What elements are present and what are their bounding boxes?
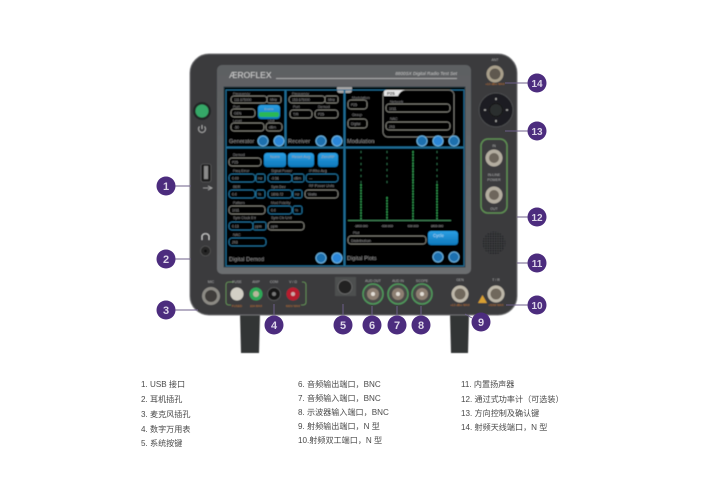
panel: digital plots: Distribution <box>351 238 371 243</box>
panel: digital demod: Pattern <box>233 201 245 205</box>
panel: generator: Unit <box>268 119 274 123</box>
legend column 3: 12. 通过式功率计（可选装） <box>461 394 564 404</box>
panel: digital demod <box>226 148 344 266</box>
panel: digital plots: Digital Plots <box>347 256 377 262</box>
panel: modulation: P25 <box>387 91 395 96</box>
legend column 1: 5. 系统按键 <box>141 438 182 448</box>
number badges: 1 <box>163 181 169 193</box>
panel: digital demod: 0.13 <box>232 224 239 228</box>
legend column 2 <box>298 379 389 445</box>
panel: digital demod: Hz <box>295 192 299 196</box>
panel: digital demod: Sym Dev <box>271 185 286 189</box>
number badges: 3 <box>163 305 169 317</box>
panel: digital plots: Cycle <box>433 233 445 238</box>
panel: digital demod: P25 <box>232 160 238 164</box>
stand leg right <box>450 313 469 353</box>
antenna port: ANT <box>492 58 499 62</box>
number badges: 14 <box>531 79 543 90</box>
screen <box>224 87 465 267</box>
panel: receiver: Demod <box>318 105 330 109</box>
multimeter ports: FUSE <box>232 280 242 284</box>
panel: digital demod: Digital Demod <box>229 257 264 263</box>
legend column 1: 1. USB 接口 <box>141 379 185 389</box>
legend column 1: 4. 数字万用表 <box>141 424 190 434</box>
panel: receiver <box>286 90 344 147</box>
number badges: 7 <box>394 320 400 332</box>
panel: digital demod: Sym Clk Unit <box>271 216 292 220</box>
panel: digital demod: ppm <box>255 224 262 228</box>
legend column 2: 9. 射频输出端口，N 型 <box>298 421 380 431</box>
through-line power meter ports: IN-LINE <box>488 173 501 177</box>
panel: digital demod: dBm <box>294 176 301 180</box>
number badges: 12 <box>531 213 543 224</box>
panel: digital demod: RF Power Units <box>309 184 334 188</box>
legend column 2: 10.射频双工端口，N 型 <box>298 435 382 445</box>
through-line power meter ports: IN <box>492 144 496 148</box>
rf ports: +13 dBm MAX <box>450 303 470 307</box>
panel: generator: 111.675000 <box>234 98 252 102</box>
panel: digital demod: 1011 <box>232 208 239 212</box>
bnc ports <box>363 279 432 304</box>
legend column 3 <box>461 379 564 432</box>
panel: receiver: 153.675000 <box>292 98 310 102</box>
brand logo: ÆROFLEX <box>229 70 272 80</box>
brand rule <box>276 78 457 79</box>
number badges: 9 <box>478 317 484 329</box>
panel: modulation: Modulation <box>347 139 374 145</box>
through-line power meter ports: POWER <box>487 178 501 182</box>
panel: modulation: NAC <box>390 117 398 121</box>
panel: generator: -50 <box>234 126 239 130</box>
number badges: 13 <box>531 127 543 138</box>
multimeter ports: COM <box>270 280 278 284</box>
panel: digital demod: NAC <box>233 233 241 237</box>
panel: digital demod: Sym Clock Err <box>233 216 257 220</box>
cycle button <box>428 231 458 245</box>
multimeter ports <box>226 280 306 308</box>
panel: digital demod: Hz <box>258 176 262 180</box>
rf ports: T / R <box>492 278 500 282</box>
bnc ports: AUD IN <box>392 279 404 283</box>
direction control <box>479 93 513 127</box>
panel: generator: MHz <box>270 98 277 102</box>
legend column 1 <box>141 379 190 448</box>
panel: modulation: Group <box>352 113 362 117</box>
panel: generator: Frequency <box>233 92 250 96</box>
bnc ports: AUD OUT <box>365 279 382 283</box>
panel: digital demod: % <box>295 208 298 212</box>
device body <box>190 54 517 315</box>
spectrum chart: -600.000 <box>381 224 393 228</box>
panel: digital demod: ZeroRF <box>321 154 335 159</box>
multimeter ports: FUSED <box>232 304 243 308</box>
panel: receiver: Port <box>293 105 300 109</box>
panel: digital demod: Norm <box>270 154 281 159</box>
antenna port: +10 dBm MAX <box>485 82 505 86</box>
mic connector: MIC <box>208 280 215 284</box>
multimeter ports: 10A MAX <box>250 304 262 308</box>
panel: digital demod: 1806.72 <box>271 192 283 196</box>
rf ports: +50W MAX <box>488 303 504 307</box>
panel: modulation: 1011 <box>389 107 396 111</box>
panel: digital demod: 0.0 <box>232 192 237 196</box>
antenna port <box>485 58 505 86</box>
icon: usb port <box>201 164 212 190</box>
number badges: 4 <box>271 320 278 332</box>
panel: digital demod: 293 <box>232 240 238 244</box>
bnc ports: SCOPE <box>416 279 429 283</box>
spectrum chart: 600.000 <box>408 224 419 228</box>
legend column 1: 3. 麦克风插孔 <box>141 409 190 419</box>
panel: digital plots: Plot <box>353 231 359 235</box>
panel: digital demod: % <box>258 192 261 196</box>
panel: generator: Generator <box>229 139 254 145</box>
multimeter ports: V / Ω <box>289 280 297 284</box>
callout lines <box>175 83 528 318</box>
legend column 3: 13. 方向控制及确认键 <box>461 408 539 418</box>
through-line power meter ports: OUT <box>490 207 499 211</box>
number badges: 2 <box>163 254 169 266</box>
panel: digital demod: Mod Fidelity <box>271 201 291 205</box>
enable button <box>258 105 280 119</box>
panel: receiver: Frequency <box>292 92 309 96</box>
number badges: 11 <box>532 259 543 270</box>
rf ports: GEN <box>456 278 464 282</box>
legend column 2: 8. 示波器输入端口，BNC <box>298 407 389 417</box>
panel: generator: GEN <box>234 112 242 116</box>
panel: receiver: Receiver <box>288 139 310 145</box>
stand leg left <box>240 313 260 353</box>
panel: generator: Port <box>233 105 240 109</box>
system key <box>335 277 356 296</box>
panel: modulation: 293 <box>389 125 395 129</box>
panel: digital demod: 0.0 <box>271 208 276 212</box>
panel: digital demod: Freq Error <box>233 169 250 173</box>
speaker grille <box>482 232 506 254</box>
legend column 3: 14. 射频天线端口，N 型 <box>461 422 547 432</box>
icon: power button <box>193 102 211 132</box>
multimeter ports: 600V MAX <box>286 304 300 308</box>
panel: modulation: Modulation <box>352 96 370 100</box>
panel: digital demod: IF/Rho Avg <box>309 169 327 173</box>
number badges: 6 <box>369 320 375 332</box>
multimeter ports: AMP <box>252 280 260 284</box>
legend column 2: 7. 音频输入端口，BNC <box>298 393 381 403</box>
number badges <box>156 74 546 334</box>
P25 settings box <box>383 90 454 137</box>
through-line power meter ports <box>481 139 507 213</box>
panel: modulation: P25 <box>351 103 357 107</box>
rf ports <box>450 278 504 307</box>
legend column 3: 11. 内置扬声器 <box>461 379 514 389</box>
legend column 2: 6. 音频输出端口，BNC <box>298 379 381 389</box>
panel: digital demod: BER <box>233 185 241 189</box>
device: test set unit <box>190 54 517 353</box>
panel: modulation <box>345 90 464 147</box>
panel: modulation: Digital <box>351 122 361 126</box>
panel: digital plots <box>345 148 464 266</box>
panel: digital demod: --- <box>309 176 312 180</box>
panel: digital demod: Watts <box>308 192 317 196</box>
screen tab <box>337 87 352 93</box>
spectrum chart: 1800.000 <box>431 224 444 228</box>
model name: 8800SX Digital Radio Test Set <box>395 71 458 76</box>
spectrum chart <box>348 151 451 228</box>
panel: generator: dBm <box>269 126 276 130</box>
demod buttons <box>264 153 286 167</box>
panel: digital demod: -0.56 <box>271 176 279 180</box>
panel: digital demod: ppm <box>271 224 278 228</box>
legend column 1: 2. 耳机插孔 <box>141 394 182 404</box>
panel: digital demod: Reset Avg <box>292 154 310 159</box>
panel: receiver: T/R <box>293 112 299 116</box>
panel: generator: Level <box>233 119 242 123</box>
panel: digital demod: Signal Power <box>271 169 293 173</box>
panel: receiver: P25 <box>318 112 324 116</box>
number badges: 5 <box>340 320 346 332</box>
panel: generator <box>226 90 285 147</box>
panel: digital demod: Demod <box>233 153 245 157</box>
screen bezel <box>217 65 471 274</box>
mic connector <box>202 280 220 305</box>
number badges: 10 <box>531 301 543 312</box>
panel: generator: Enable <box>264 107 274 111</box>
icon: headphone jack <box>200 234 210 256</box>
number badges: 8 <box>418 320 424 332</box>
panel: digital demod: 0.00 <box>232 176 239 180</box>
spectrum chart: -1800.000 <box>354 224 368 228</box>
panel: modulation: Network <box>390 100 403 104</box>
panel: receiver: MHz <box>328 98 335 102</box>
